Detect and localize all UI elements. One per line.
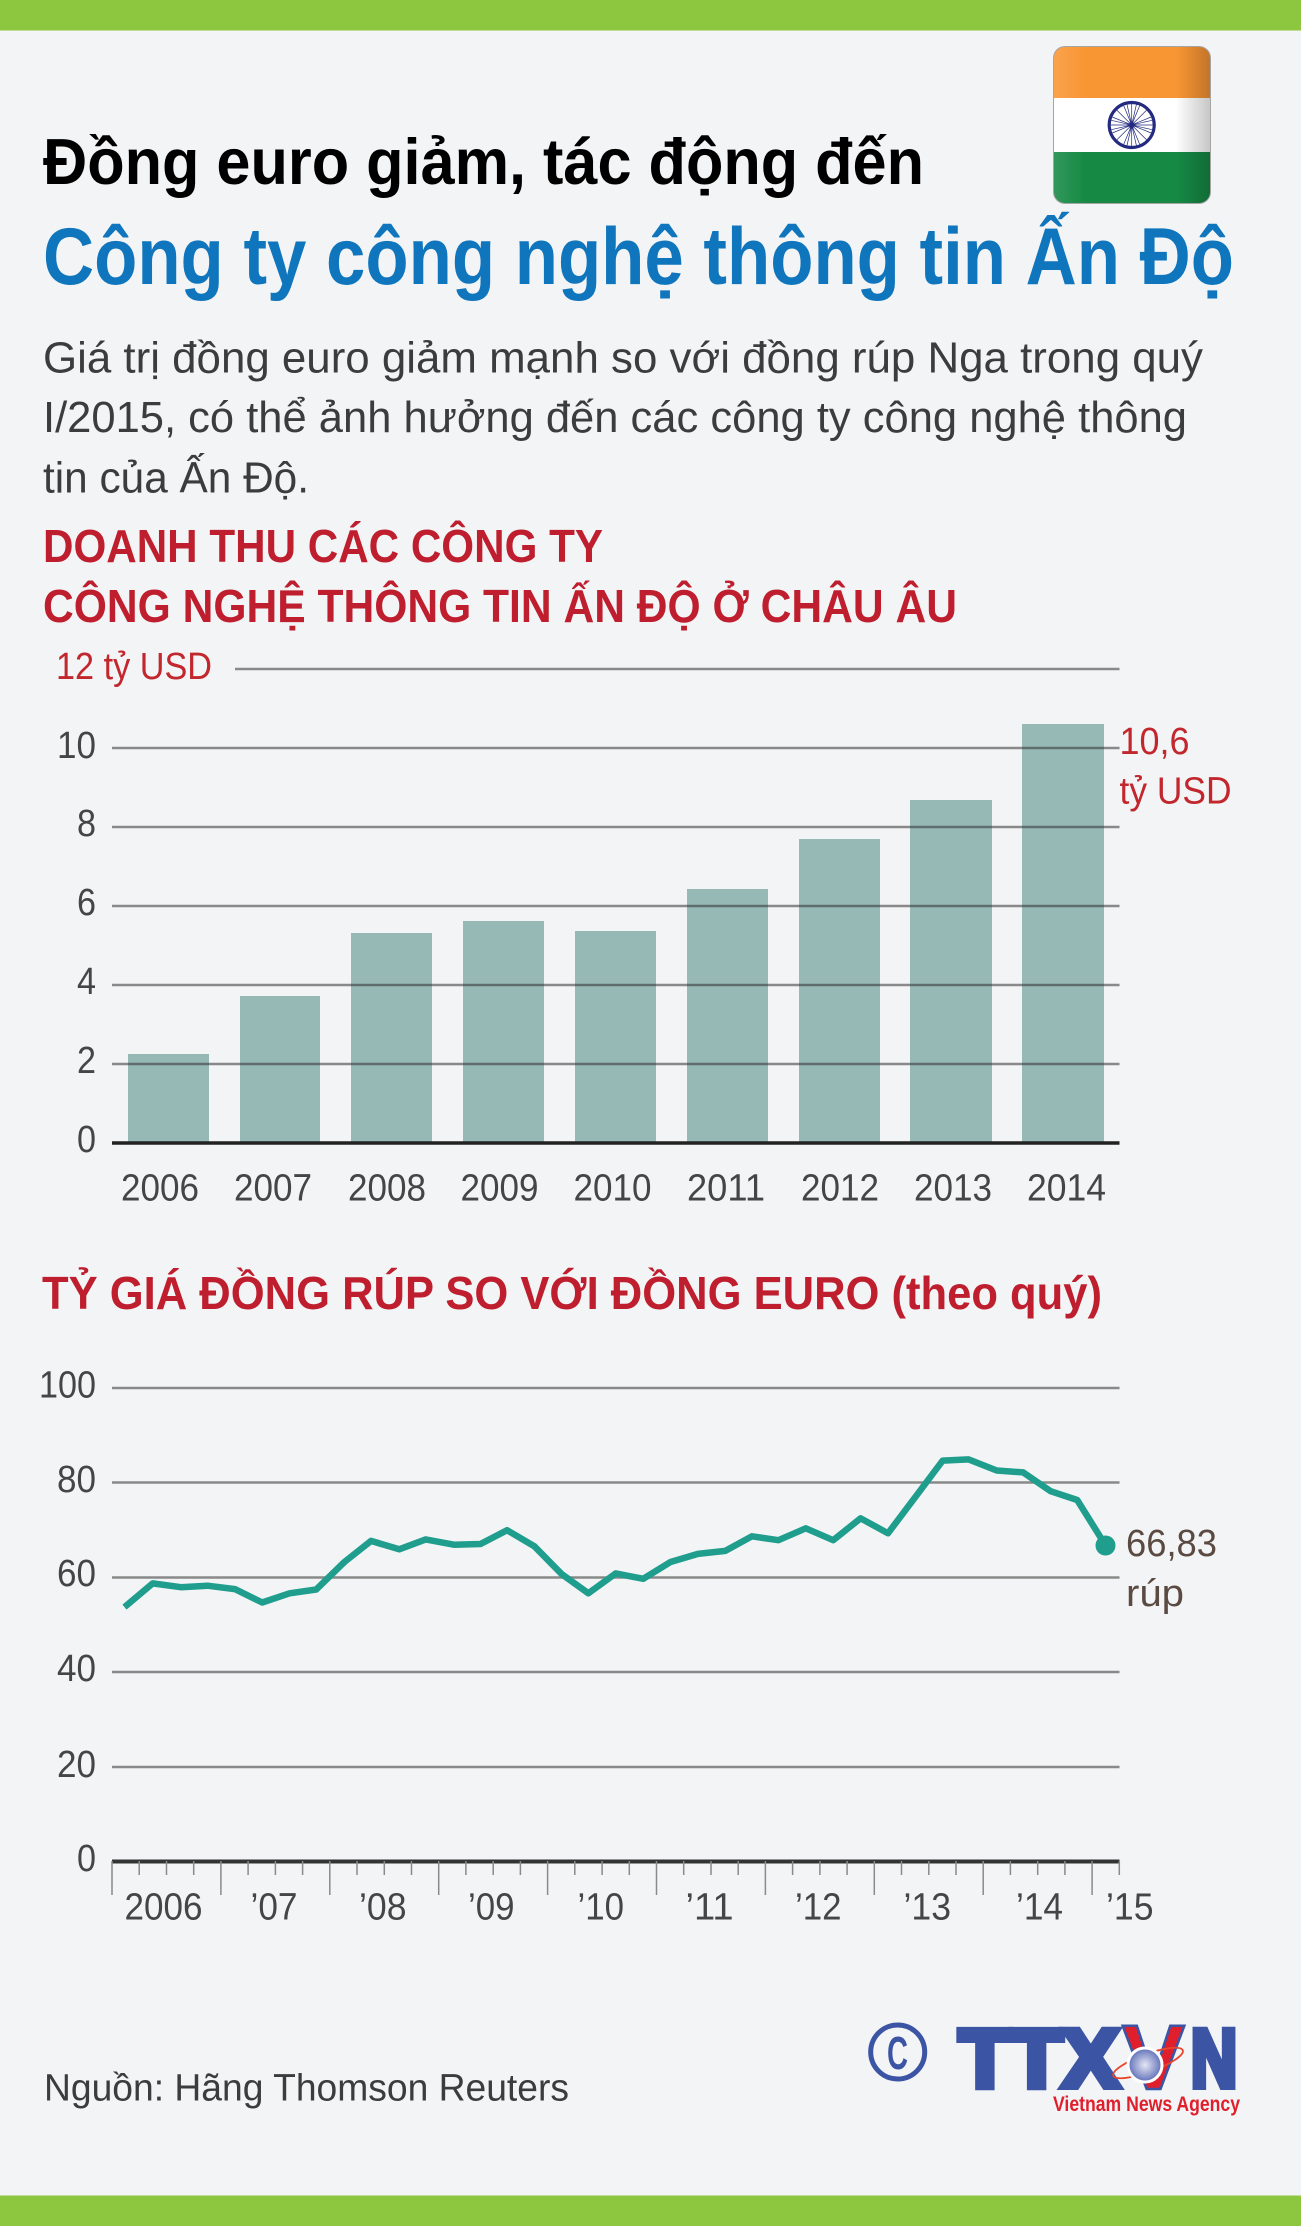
heading: revenue chart xyxy=(43,520,957,632)
x axis labels: ’09 xyxy=(468,1886,514,1928)
bars xyxy=(128,724,1104,1142)
y axis labels: 10 xyxy=(57,725,96,767)
title line 1: Đồng euro giảm, tác động đến xyxy=(43,125,924,198)
line chart: rouble per euro xyxy=(39,1364,1217,1928)
x axis labels: 2011 xyxy=(687,1168,765,1210)
y axis labels xyxy=(39,1364,96,1880)
y axis labels: 40 xyxy=(57,1648,96,1690)
y axis labels: 0 xyxy=(77,1119,96,1161)
logo: TTXVN Vietnam News Agency: TTX xyxy=(959,2014,1119,2104)
rate line xyxy=(124,1459,1105,1607)
x axis labels: 2007 xyxy=(234,1168,312,1210)
x axis labels: ’13 xyxy=(904,1886,951,1928)
x axis labels: 2013 xyxy=(914,1168,992,1210)
y axis labels: 80 xyxy=(57,1459,96,1501)
x axis labels: ’08 xyxy=(359,1886,406,1928)
y axis labels xyxy=(56,646,212,1161)
icon: globe and orbit xyxy=(1110,2042,1186,2084)
x axis labels: ’07 xyxy=(250,1886,298,1928)
y axis labels: 4 xyxy=(77,961,96,1003)
x axis labels: ’14 xyxy=(1016,1886,1063,1928)
y axis labels: 12 tỷ USD xyxy=(56,646,212,688)
x axis labels xyxy=(124,1886,1154,1928)
icon: Indian flag xyxy=(1053,46,1211,204)
x axis labels: ’15 xyxy=(1106,1886,1154,1928)
y axis labels: 2 xyxy=(77,1040,96,1082)
intro paragraph xyxy=(43,334,1203,502)
callout: 66,83 rúp xyxy=(1126,1523,1217,1615)
time axis ticks xyxy=(112,1861,1119,1895)
x axis labels: 2006 xyxy=(124,1886,202,1928)
intro paragraph: I/2015, có thể ảnh hưởng đến các công ty công nghệ thông xyxy=(43,393,1187,442)
heading: revenue chart: DOANH THU CÁC CÔNG TY xyxy=(43,520,603,572)
x axis labels: 2014 xyxy=(1027,1168,1106,1210)
y axis labels: 0 xyxy=(77,1838,96,1880)
intro paragraph: Giá trị đồng euro giảm mạnh so với đồng rúp Nga trong quý xyxy=(43,334,1203,382)
callout: 66,83 rúp: 66,83 xyxy=(1126,1523,1217,1565)
top green band xyxy=(0,0,1301,30)
logo: TTXVN Vietnam News Agency xyxy=(959,2007,1240,2116)
x axis labels: 2006 xyxy=(121,1168,199,1210)
x axis labels: 2010 xyxy=(574,1168,652,1210)
x axis labels: ’11 xyxy=(686,1886,734,1928)
x axis labels: 2012 xyxy=(801,1168,879,1210)
x axis labels: 2009 xyxy=(460,1168,538,1210)
icon: copyright mark xyxy=(871,2025,925,2079)
logo: TTXVN Vietnam News Agency: Vietnam News Agency xyxy=(1053,2093,1240,2116)
callout: 66,83 rúp: rúp xyxy=(1126,1573,1184,1615)
icon: copyright mark: C xyxy=(887,2027,908,2079)
y axis labels: 8 xyxy=(77,803,96,845)
logo: TTXVN Vietnam News Agency: V xyxy=(1122,2007,1185,2109)
x axis labels xyxy=(121,1168,1106,1210)
y axis labels: 6 xyxy=(77,882,96,924)
bar chart: revenue 2006-2014 xyxy=(56,646,1232,1210)
bottom green band xyxy=(0,2196,1301,2226)
callout: 10,6 tỷ USD: tỷ USD xyxy=(1120,770,1232,812)
x axis labels: 2008 xyxy=(348,1168,426,1210)
end point marker xyxy=(1096,1536,1116,1556)
y axis labels: 20 xyxy=(57,1744,96,1786)
callout: 10,6 tỷ USD xyxy=(1120,721,1232,812)
logo: TTXVN Vietnam News Agency: N xyxy=(1191,2014,1237,2104)
callout: 10,6 tỷ USD: 10,6 xyxy=(1120,721,1190,763)
source note: Nguồn: Hãng Thomson Reuters xyxy=(44,2068,569,2110)
y axis labels: 60 xyxy=(57,1553,96,1595)
x axis labels: ’10 xyxy=(578,1886,624,1928)
heading: exchange rate chart: TỶ GIÁ ĐỒNG RÚP SO VỚI ĐỒNG EURO (theo quý) xyxy=(42,1267,1102,1319)
y axis labels: 100 xyxy=(39,1364,96,1406)
intro paragraph: tin của Ấn Độ. xyxy=(43,452,309,502)
x axis labels: ’12 xyxy=(795,1886,842,1928)
heading: revenue chart: CÔNG NGHỆ THÔNG TIN ẤN ĐỘ Ở CHÂU ÂU xyxy=(43,580,957,632)
